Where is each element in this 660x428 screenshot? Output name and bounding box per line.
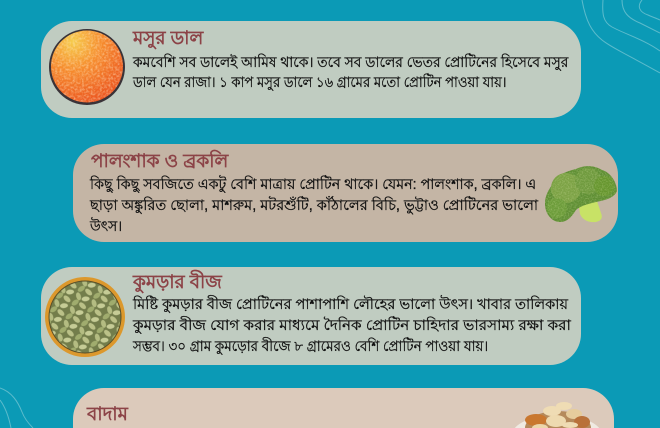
heading: পালংশাক ও ব্রকলি bbox=[91, 150, 228, 171]
icon: broccoli bbox=[545, 166, 617, 222]
heading: কুমড়ার বীজ bbox=[133, 271, 222, 292]
icon: bowl of red lentils bbox=[49, 29, 125, 105]
body text: কিছু কিছু সবজিতে একটু বেশি মাত্রায় প্রোটিন থাকে। যেমন: পালংশাক, ব্রকলি। এ bbox=[90, 177, 536, 193]
heading: মসুর ডাল bbox=[133, 27, 203, 48]
body text: ডাল যেন রাজা। ১ কাপ মসুর ডালে ১৬ গ্রামের মতো প্রোটিন পাওয়া যায়। bbox=[133, 75, 507, 91]
body text bbox=[132, 52, 569, 91]
icon: bowl of nuts bbox=[515, 402, 599, 428]
body text bbox=[132, 294, 572, 355]
panel: nuts bbox=[73, 388, 614, 428]
panel: pumpkin seeds bbox=[41, 267, 581, 365]
body text: কুমড়ার বীজ যোগ করার মাধ্যমে দৈনিক প্রোটিন চাহিদার ভারসাম্য রক্ষা করা bbox=[133, 318, 571, 334]
body text: ছাড়া অঙ্কুরিত ছোলা, মাশরুম, মটরশুঁটি, কাঁঠালের বিচি, ভুট্টাও প্রোটিনের ভালো bbox=[90, 198, 538, 214]
body text: উৎস। bbox=[90, 219, 122, 235]
panel: spinach and broccoli bbox=[73, 144, 618, 242]
panel: masoor dal bbox=[41, 21, 581, 118]
icon: bowl of pumpkin seeds bbox=[45, 277, 125, 357]
body text: কমবেশি সব ডালেই আমিষ থাকে। তবে সব ডালের ভেতর প্রোটিনের হিসেবে মসুর bbox=[133, 55, 568, 71]
body text: মিষ্টি কুমড়ার বীজ প্রোটিনের পাশাপাশি লৌহের ভালো উৎস। খাবার তালিকায় bbox=[133, 297, 568, 313]
heading: বাদাম bbox=[87, 403, 128, 424]
body text: সম্ভব। ৩০ গ্রাম কুমড়োর বীজে ৮ গ্রামেরও বেশি প্রোটিন পাওয়া যায়। bbox=[133, 339, 488, 355]
body text bbox=[90, 174, 538, 235]
